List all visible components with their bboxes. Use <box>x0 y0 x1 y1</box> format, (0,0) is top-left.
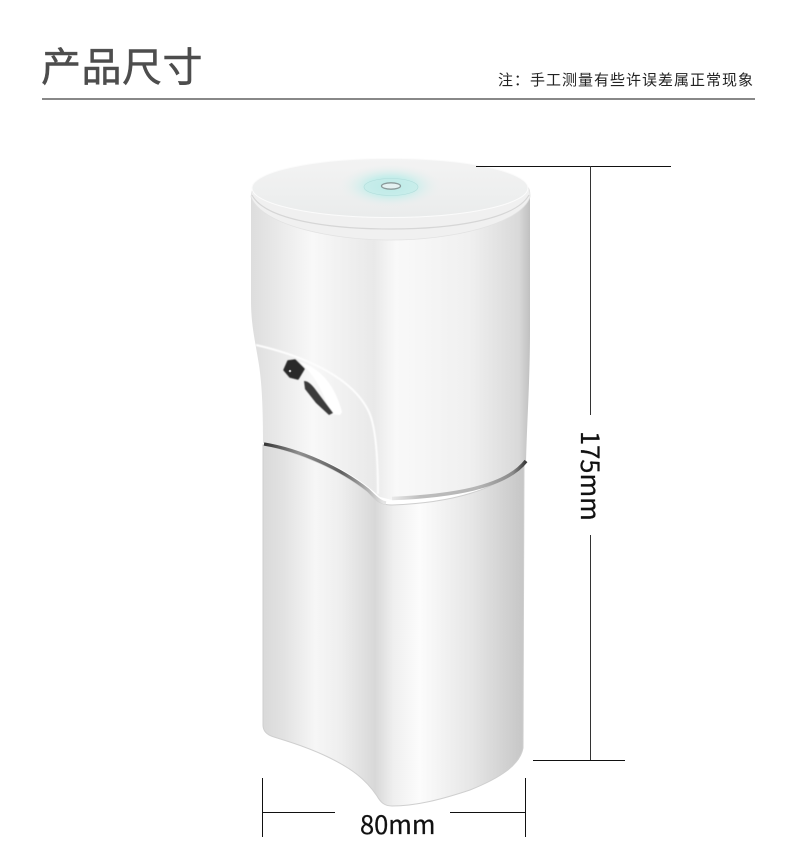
note text: 注：手工测量有些许误差属正常现象 <box>498 72 754 89</box>
lid rim <box>251 186 530 240</box>
rim groove <box>252 195 529 229</box>
title: 产品尺寸 <box>41 46 203 90</box>
nozzle slot <box>304 381 333 415</box>
lower body <box>263 445 524 806</box>
width label: 80mm <box>360 805 436 842</box>
silver band left <box>264 444 386 503</box>
sensor dot <box>289 370 291 372</box>
lid top <box>252 158 528 218</box>
recess highlight <box>300 362 342 415</box>
sensor window <box>284 360 304 379</box>
product: soap dispenser <box>251 158 530 806</box>
height label: 175mm <box>573 431 610 521</box>
touch ring <box>364 178 418 196</box>
touch button <box>382 183 400 189</box>
recess edge <box>256 345 378 494</box>
header rule <box>42 98 755 100</box>
upper body <box>251 196 530 500</box>
silver band right <box>392 461 526 498</box>
touch glow <box>338 164 442 208</box>
